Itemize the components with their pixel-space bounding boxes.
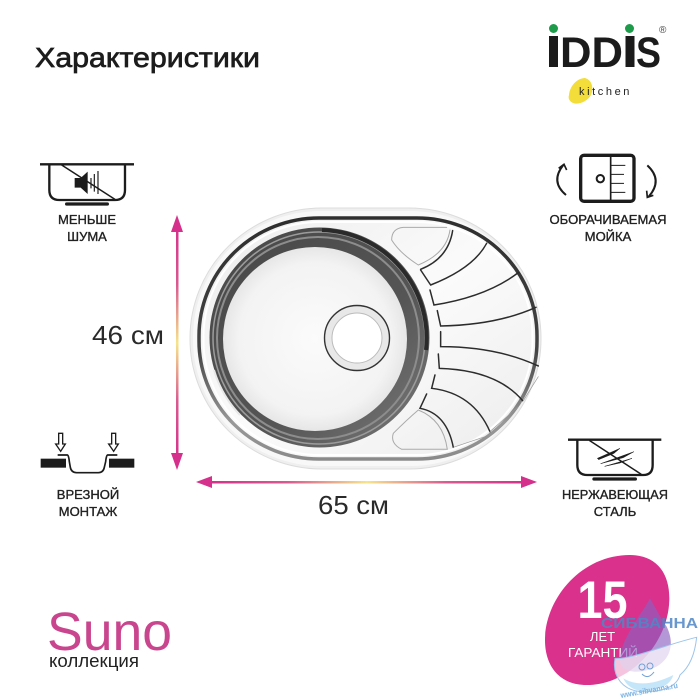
logo: iddis kitchen: kitchen bbox=[579, 86, 631, 98]
dimension: width: 65 см bbox=[318, 490, 389, 520]
sink bowl bbox=[210, 228, 430, 448]
sink rim bbox=[190, 208, 541, 469]
icon: flush mount bbox=[41, 433, 134, 473]
icon: stainless steel bbox=[568, 440, 661, 479]
label: less noise: МЕНЬШЕ bbox=[58, 212, 116, 227]
sink inner deck bbox=[199, 218, 537, 459]
arrow: height bbox=[171, 215, 183, 470]
label: reversible sink: МОЙКА bbox=[585, 229, 632, 244]
label: stainless steel: НЕРЖАВЕЮЩАЯ bbox=[562, 487, 668, 502]
title: Характеристики bbox=[35, 42, 260, 73]
logo: iddis kitchen: DD bbox=[560, 29, 623, 77]
collection caption: коллекция bbox=[49, 651, 139, 671]
sink drainer ribs bbox=[392, 227, 538, 449]
warranty badge: ГАРАНТИЙ bbox=[568, 645, 638, 660]
dimension: height: 46 см bbox=[92, 320, 164, 350]
logo: iddis kitchen bbox=[549, 24, 667, 104]
logo: iddis kitchen: S bbox=[636, 29, 661, 77]
watermark: СИБВАННА bbox=[601, 615, 698, 632]
label: flush mount: МОНТАЖ bbox=[59, 504, 117, 519]
logo: iddis kitchen: ® bbox=[659, 25, 667, 36]
watermark: www.sibvanna.ru bbox=[619, 681, 679, 700]
label: reversible sink: ОБОРАЧИВАЕМАЯ bbox=[550, 212, 666, 227]
warranty badge: 15 bbox=[578, 571, 628, 630]
icon: less noise bbox=[40, 164, 134, 204]
sink drain bbox=[324, 306, 390, 370]
collection name: Suno bbox=[47, 602, 172, 662]
label: flush mount: ВРЕЗНОЙ bbox=[57, 487, 119, 502]
sink bbox=[190, 208, 541, 469]
warranty badge: ЛЕТ bbox=[590, 629, 615, 644]
watermark bbox=[601, 598, 698, 700]
label: stainless steel: СТАЛЬ bbox=[594, 504, 636, 519]
icon: reversible sink bbox=[557, 155, 656, 201]
arrow: width bbox=[196, 476, 537, 488]
warranty badge bbox=[545, 555, 669, 685]
label: less noise: ШУМА bbox=[67, 229, 107, 244]
